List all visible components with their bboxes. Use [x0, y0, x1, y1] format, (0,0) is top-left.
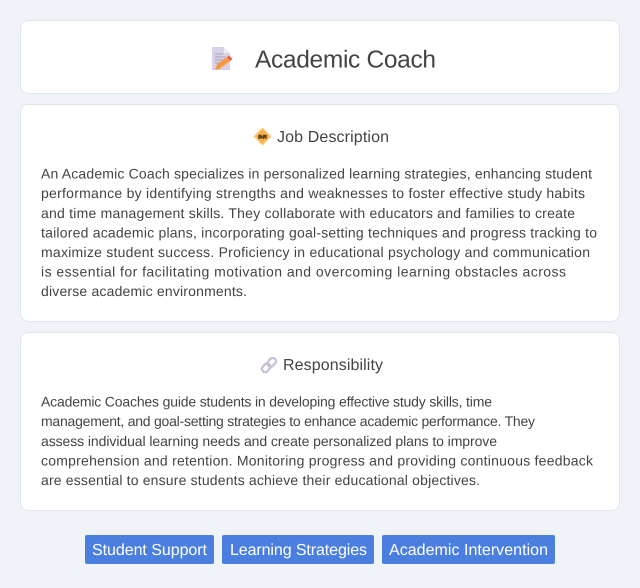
text block: responsibility: management, and goal-setting strategies to enhance academic performance. They — [41, 413, 535, 429]
panel: job description — [20, 104, 620, 322]
text block: job description: and time management skills. They collaborate with educators and families to create — [41, 205, 575, 221]
text block: responsibility: Academic Coaches guide students in developing effective study skills, time — [41, 394, 492, 410]
text block: job description: tailored academic plans, incorporating goal-setting techniques and progress tracking to — [41, 224, 597, 240]
icon: diamond sign — [254, 128, 272, 146]
text block: job description: diverse academic environments. — [41, 283, 247, 299]
tag: student support: Student Support — [92, 542, 208, 559]
text block: job description: maximize student success. Proficiency in educational psychology and communication — [41, 244, 590, 260]
text block: responsibility: assess individual learning needs and create personalized plans to improve — [41, 433, 497, 449]
heading: responsibility: Responsibility — [283, 357, 383, 374]
text block: job description — [41, 166, 597, 299]
text block: responsibility — [41, 394, 594, 488]
tag: learning strategies: Learning Strategies — [230, 542, 367, 559]
tag: learning strategies — [222, 535, 374, 564]
icon: chain link — [260, 356, 278, 374]
panel: title header — [20, 20, 620, 94]
text block: responsibility: are essential to ensure students achieve their educational objectives. — [41, 472, 480, 488]
panel: responsibility — [20, 332, 620, 511]
icon: document with pencil — [212, 47, 232, 70]
text block: job description: An Academic Coach specializes in personalized learning strategies, enhancing student — [41, 166, 592, 182]
heading: job description: Job Description — [277, 129, 389, 146]
text block: job description: performance by identifying strengths and weaknesses to foster effective study habits — [41, 185, 585, 201]
tag: academic intervention: Academic Intervention — [389, 542, 548, 559]
tag: academic intervention — [382, 535, 555, 564]
tag: student support — [85, 535, 214, 564]
title: Academic Coach — [255, 46, 436, 74]
text block: job description: is essential for facilitating motivation and overcoming learning obstacles across — [41, 264, 566, 280]
text block: responsibility: comprehension and retention. Monitoring progress and providing continuous feedback — [41, 452, 594, 468]
